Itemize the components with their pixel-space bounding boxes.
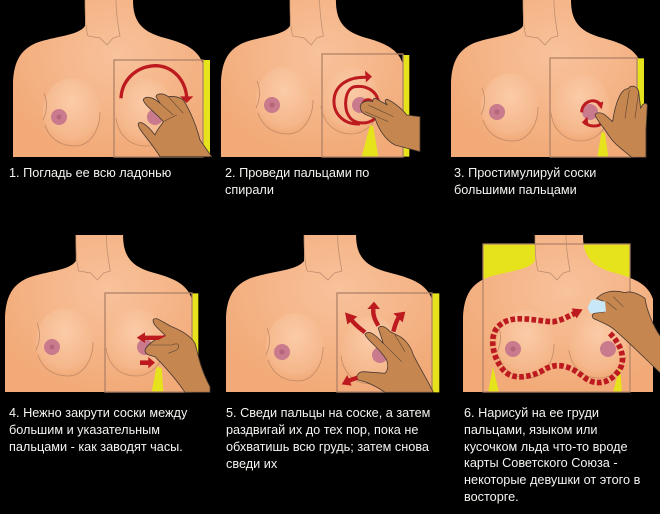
left breast — [256, 66, 314, 134]
outline box — [483, 244, 630, 392]
hand — [145, 319, 210, 392]
caption 4 line 2: большим и указательным — [9, 423, 160, 437]
left breast — [36, 308, 94, 376]
torso — [463, 235, 653, 392]
yellow strip and wedge — [362, 55, 409, 157]
highlight box — [550, 58, 637, 157]
caption 1: 1. Погладь ее всю ладонью — [9, 166, 171, 180]
arrow: right — [140, 357, 155, 368]
right breast — [321, 66, 379, 134]
caption 4 line 3: пальцами - как заводят часы. — [9, 440, 183, 454]
right breast — [106, 308, 164, 376]
caption 6 line 6: восторге. — [464, 490, 519, 504]
arrow: circular stroke — [121, 66, 193, 103]
yellow strip and wedge — [152, 293, 198, 392]
panel 5: spread fingers — [226, 235, 439, 471]
left breast — [266, 313, 324, 381]
arrow: spiral — [334, 71, 378, 124]
caption 6 line 2: пальцами, языком или — [464, 423, 598, 437]
panel 4: twist nipples — [5, 235, 210, 454]
left breast — [43, 78, 101, 146]
highlight box — [337, 293, 432, 392]
left breast — [497, 310, 555, 378]
yellow strip and wedge — [597, 58, 644, 157]
caption 6 line 3: кусочком льда что-то вроде — [464, 440, 628, 454]
caption 2: 2. Проведи пальцами по — [225, 166, 369, 180]
panel 2: spiral with fingers — [221, 0, 420, 197]
hand — [357, 326, 433, 392]
caption 3 line 2: большими пальцами — [454, 183, 577, 197]
highlight box — [114, 60, 203, 157]
arrows: spreading — [342, 302, 405, 386]
caption 6 line 4: карты Советского Союза - — [464, 456, 618, 470]
caption 6 line 5: некоторые девушки от этого в — [464, 473, 641, 487]
caption 5: 5. Сведи пальцы на соске, а затем — [226, 406, 430, 420]
highlight box — [105, 293, 192, 392]
panel 3: stimulate with thumbs — [451, 0, 647, 197]
torso — [451, 0, 641, 157]
caption 3: 3. Простимулируй соски — [454, 166, 596, 180]
right breast — [341, 316, 399, 384]
arrow: dashed map outline — [493, 308, 622, 383]
yellow background — [483, 244, 630, 294]
right breast — [551, 73, 609, 141]
hand holding ice — [592, 291, 660, 373]
yellow strip — [162, 60, 210, 157]
torso — [221, 0, 403, 157]
yellow strip — [432, 293, 439, 392]
torso — [5, 235, 192, 392]
arrow: small spiral — [582, 101, 603, 126]
arrow: left — [137, 332, 167, 343]
yellow side wedges — [488, 367, 622, 392]
caption 5 line 2: раздвигай их до тех пор, пока не — [226, 423, 418, 437]
panel 6: draw a map — [463, 235, 660, 504]
caption 6: 6. Нарисуй на ее груди — [464, 406, 599, 420]
right breast — [569, 310, 627, 378]
icon: ice cube — [588, 299, 606, 313]
panel 1: stroke with palm — [9, 0, 212, 180]
left breast — [481, 73, 539, 141]
hand — [138, 94, 212, 157]
caption 5 line 4: сведи их — [226, 457, 278, 471]
caption 5 line 3: обхватишь всю грудь; затем снова — [226, 440, 430, 454]
torso — [226, 235, 432, 392]
torso — [13, 0, 203, 157]
highlight box — [322, 54, 403, 157]
right breast — [116, 78, 174, 146]
caption 4: 4. Нежно закрути соски между — [9, 406, 188, 420]
caption 2 line 2: спирали — [225, 183, 274, 197]
hand — [360, 98, 420, 152]
hand — [595, 86, 647, 157]
